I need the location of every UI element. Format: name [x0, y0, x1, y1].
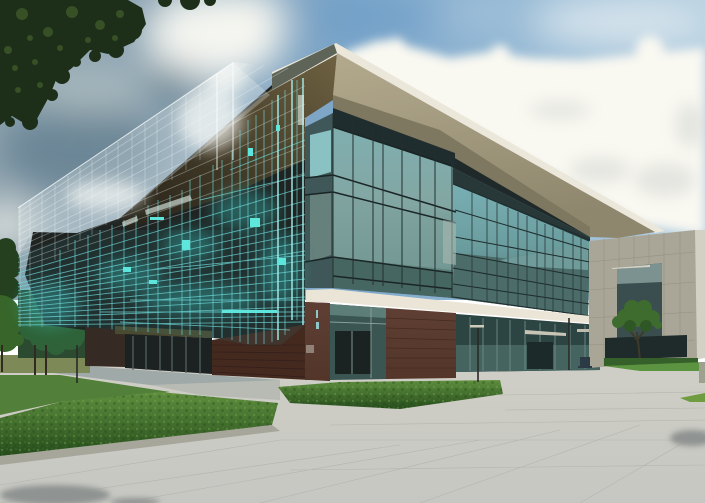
tree in front of annex: [612, 300, 662, 360]
lawn and hedges: [0, 358, 705, 465]
roof edge: [272, 43, 665, 233]
teal glow: [18, 230, 305, 345]
far hedge and lawn on right: [604, 358, 698, 366]
main white cloud mass: [345, 36, 705, 235]
left hedge: [0, 392, 278, 456]
curb: [0, 425, 280, 465]
tree canopy top left: [0, 0, 216, 130]
lamp posts: [77, 318, 569, 383]
roof soffit: [333, 53, 655, 238]
white annotation marks: [122, 95, 304, 227]
left lawn: [0, 375, 170, 415]
left wing ground floor and brick base: [85, 302, 330, 381]
sky with clouds: [0, 0, 705, 300]
dark hologram-covered facade: [25, 85, 305, 345]
white haze panel over the sky: [18, 63, 270, 255]
right annex block: [589, 230, 705, 368]
centre hedge: [278, 380, 503, 409]
bright data blocks: [123, 125, 286, 313]
left soffit: [120, 53, 337, 228]
cyan wireframe lines: [18, 78, 305, 344]
right wing glass facade: [452, 168, 590, 316]
left wing glass facade: [305, 108, 456, 298]
pavement ground: [0, 365, 705, 503]
seated people on bench: [578, 357, 592, 368]
main building: [25, 43, 665, 381]
ground floor brick and glass: [305, 302, 617, 380]
shadows on pavement: [0, 430, 705, 503]
building wall signs: [306, 310, 319, 353]
background trees and lawn on the left: [0, 238, 90, 376]
white floor slab: [306, 289, 600, 324]
holographic digital twin overlay: [18, 26, 319, 353]
white wireframe lines: [18, 62, 305, 327]
